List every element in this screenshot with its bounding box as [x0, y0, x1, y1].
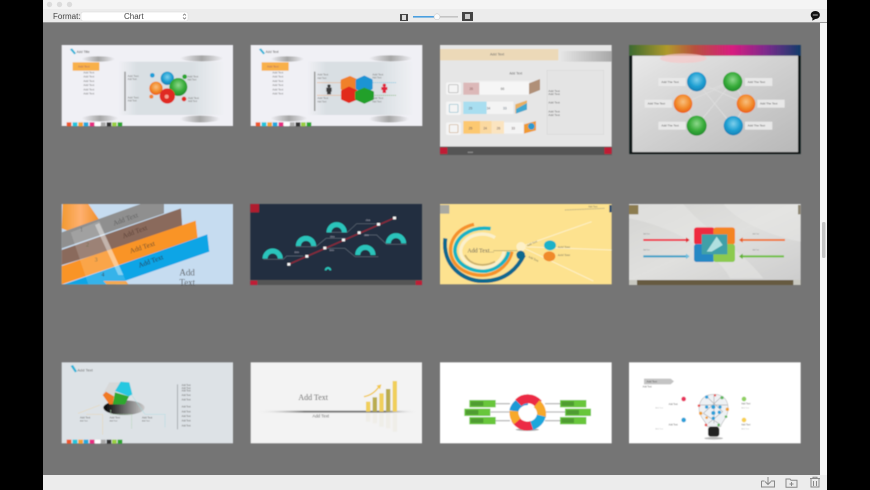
orange menu: Add Text — [267, 64, 279, 68]
hexagon labels: Add Text — [317, 96, 328, 100]
hexagon labels: Add Text — [372, 96, 383, 100]
puzzle — [694, 227, 735, 262]
green marker — [741, 397, 751, 409]
arrow — [364, 384, 381, 397]
arrow labels: Add Text — [643, 232, 650, 235]
sphere labels: Add The Text — [648, 102, 665, 106]
menu list: Add Text — [83, 79, 95, 83]
menu list: Add Text — [83, 83, 95, 87]
right list: Add Text — [182, 410, 191, 413]
row 3: 24 — [483, 126, 487, 130]
gallery of chart thumbnails — [62, 45, 801, 444]
format dropdown — [81, 12, 188, 21]
ray labels: Add Text — [526, 239, 538, 248]
side text box: Add Text — [548, 101, 560, 105]
sphere labels: Add The Text — [661, 80, 679, 84]
icon: add folder — [786, 479, 797, 487]
bubble labels: Add Text — [187, 78, 197, 81]
gauge labels: data — [366, 219, 371, 222]
menu list: Add Text — [83, 87, 95, 91]
gauge labels: data — [294, 251, 300, 254]
centre title: Add Text... — [467, 248, 495, 254]
connector lines — [263, 224, 407, 259]
subtitle: Add Text — [312, 413, 330, 418]
pink marker: Add Text — [669, 403, 678, 406]
hexagon labels: Add Text — [317, 72, 328, 76]
ellipses — [543, 240, 570, 261]
row 2: 25 — [469, 107, 473, 111]
rays — [521, 222, 612, 281]
slide title: Add Text — [77, 367, 94, 372]
thumbnail: yellow concentric arcs — [440, 204, 612, 284]
row 3: 26 — [497, 126, 501, 130]
header note: Add Text — [588, 206, 598, 209]
hexagon cluster — [342, 77, 373, 102]
add text caption — [179, 268, 196, 287]
icon: download — [762, 477, 774, 487]
menu list — [83, 70, 95, 96]
leader labels: Add Text — [110, 415, 120, 419]
sphere labels: Add The Text — [748, 124, 765, 128]
menu list: Add Text — [272, 70, 283, 74]
bubble labels: Add Text — [128, 74, 139, 78]
grey ribbon — [62, 204, 164, 248]
icon: chat bubble — [811, 11, 820, 21]
icon: pencil — [71, 365, 77, 372]
bubble labels — [128, 74, 199, 103]
orange ribbon — [62, 221, 198, 284]
row 3: 25 — [469, 126, 473, 130]
header note — [565, 206, 605, 210]
add text caption: Text — [179, 277, 196, 287]
leader labels — [80, 415, 153, 423]
row 1 — [446, 79, 540, 95]
blue marker — [655, 418, 686, 430]
brown ribbon: Add Text — [121, 224, 148, 240]
rainbow header — [629, 45, 801, 56]
ray labels: Add Text — [528, 255, 539, 263]
menu list: Add Text — [83, 70, 95, 74]
shadow — [103, 400, 145, 415]
thumbnail: ring with green boxes — [440, 362, 612, 443]
side text box: Add Text — [548, 113, 560, 117]
glass highlight — [71, 221, 127, 284]
thumbnail: four hexagons with people — [251, 45, 422, 126]
brown ribbon — [62, 208, 182, 265]
bubble labels: Add Text — [188, 100, 197, 103]
title bar — [43, 0, 827, 12]
yellow marker: Add Text — [741, 427, 749, 430]
add text caption: Add — [179, 268, 195, 278]
format label: Format: — [53, 12, 81, 21]
brown ribbon: 2 — [86, 243, 89, 249]
green marker: Add Text — [741, 406, 749, 409]
concentric arcs — [445, 224, 524, 281]
right list: Add Text — [182, 399, 191, 402]
bubble labels: Add Text — [188, 96, 199, 100]
leader labels: Add Text — [80, 420, 88, 423]
blue ribbon — [64, 234, 209, 284]
orange ribbon: 3 — [95, 258, 98, 264]
dotted guides — [317, 83, 396, 95]
menu list: Add Text — [272, 75, 283, 79]
leader lines — [78, 395, 165, 434]
row 2: 33 — [503, 107, 507, 111]
right list — [182, 384, 191, 427]
thumbnail: puzzle with arrows — [629, 204, 801, 285]
grey ribbon: Add Text — [112, 211, 139, 228]
orange band bottom — [103, 281, 128, 284]
spheres — [674, 72, 755, 136]
leader labels: Add Text — [142, 420, 150, 423]
toolbar — [43, 9, 827, 23]
menu list — [272, 70, 283, 96]
baseline shadow — [257, 411, 417, 413]
timeline — [287, 217, 396, 266]
header band: Add Text — [490, 53, 504, 57]
arrow labels — [643, 232, 760, 252]
leader labels: Add Text — [142, 415, 153, 419]
slide title: Add Text — [298, 393, 329, 402]
side text box: Add Text — [548, 109, 560, 113]
table title: Add Text — [509, 71, 522, 75]
vertical orange band — [62, 204, 99, 232]
right list: Add Text — [182, 424, 191, 427]
arrow labels: Add Text — [643, 249, 650, 252]
ellipses: Add Text — [558, 245, 570, 249]
slide title: Add Text — [266, 50, 279, 54]
sphere labels — [645, 78, 785, 130]
leader labels: Add Text — [110, 420, 118, 423]
ray labels — [526, 239, 539, 263]
sphere labels: Add The Text — [760, 102, 778, 106]
grey ribbon: 1 — [80, 228, 83, 234]
right list: Add Text — [182, 394, 191, 397]
hexagon labels: Add Text — [317, 77, 327, 80]
blue ribbon: Add Text — [137, 253, 164, 270]
hexagon labels: Add Text — [372, 77, 382, 80]
connector lines — [683, 82, 746, 126]
bubble labels: Add Text — [128, 99, 137, 102]
hexagon labels: Add Text — [317, 100, 327, 103]
menu list: Add Text — [272, 92, 283, 96]
row 3 — [446, 121, 536, 135]
green marker: Add Text — [741, 403, 751, 406]
scrollbar — [820, 23, 827, 475]
colour swatches — [67, 440, 122, 444]
gauges — [265, 225, 404, 270]
bubble labels: Add Text — [187, 74, 198, 78]
blue ribbon: 4 — [101, 273, 104, 279]
format dropdown: Chart — [124, 12, 144, 21]
thumbnail: diagonal ribbons — [62, 204, 233, 287]
menu list: Add Text — [83, 92, 95, 96]
thumbnail: hexagon bubbles — [62, 45, 233, 126]
arrow labels: Add Text — [753, 232, 760, 235]
bubble labels: Add Text — [128, 78, 137, 81]
yellow marker: Add Text — [741, 424, 751, 427]
pink marker — [655, 397, 686, 410]
thumbnail: 3D table — [440, 45, 612, 155]
slide title: Add Title — [77, 50, 90, 54]
side text box: Add Text — [548, 89, 560, 93]
ellipses: Add Text — [558, 253, 570, 257]
bubble labels: Add Text — [128, 95, 139, 99]
header band — [440, 49, 558, 60]
gauge labels: data — [330, 235, 335, 238]
nav bar — [440, 147, 612, 155]
thumbnail: six spheres — [629, 45, 801, 154]
icon: person dark — [326, 84, 332, 94]
hexagon labels — [317, 72, 383, 103]
icon: person red — [381, 84, 387, 93]
sphere labels: Add The Text — [661, 124, 679, 128]
right list: Add Text — [182, 384, 191, 387]
icon: pencil — [259, 48, 265, 54]
row 1: 66 — [501, 87, 505, 91]
bubble cluster — [149, 72, 187, 104]
row 2: 34 — [487, 107, 491, 111]
side text box — [547, 70, 604, 134]
right list: Add Text — [182, 415, 191, 418]
bar chart — [366, 381, 397, 432]
menu list: Add Text — [83, 75, 95, 79]
colour swatches — [256, 122, 311, 126]
thumbnail: rising bars — [251, 362, 422, 443]
right list: Add Text — [182, 420, 191, 423]
ring — [514, 399, 542, 426]
menu list: Add Text — [272, 83, 283, 87]
side text box: Add Text — [548, 92, 560, 96]
thumbnail: light bulb network — [629, 362, 801, 443]
thumbnail: dark timeline gauges — [250, 204, 422, 285]
right boxes — [560, 400, 591, 424]
pink marker: Add Text — [655, 407, 663, 410]
bottom bar — [43, 475, 827, 490]
blue marker: Add Text — [655, 427, 663, 430]
colour swatches — [67, 122, 122, 126]
title tag — [643, 379, 674, 389]
orange menu: Add Text — [78, 64, 90, 68]
yellow marker — [741, 418, 751, 430]
connector lines — [491, 404, 565, 421]
right list: Add Text — [182, 406, 191, 409]
menu list: Add Text — [272, 87, 283, 91]
polyhedron — [103, 382, 132, 404]
orange ribbon: Add Text — [129, 240, 156, 255]
row 2 — [446, 100, 527, 115]
size slider — [400, 12, 473, 21]
thumbnail: dodecahedron — [62, 362, 233, 444]
sphere labels: Add The Text — [748, 80, 765, 84]
title tag: Add Text — [647, 380, 657, 384]
icon: pencil — [70, 48, 76, 54]
arrows — [643, 240, 785, 256]
row 1: 26 — [469, 87, 473, 91]
hexagon labels: Add Text — [372, 100, 382, 103]
right list: Add Text — [182, 387, 191, 390]
gauge labels: data — [329, 249, 335, 252]
icon: trash — [810, 477, 820, 487]
title tag: Add Text — [643, 386, 652, 389]
orange menu — [262, 62, 289, 71]
hexagon labels: Add Text — [372, 72, 383, 76]
arrow labels: Add Text — [753, 249, 760, 252]
left boxes — [464, 400, 496, 424]
bulb — [698, 394, 729, 440]
orange menu — [73, 62, 99, 71]
row 3: 33 — [511, 126, 515, 130]
gauge labels: data — [364, 234, 369, 237]
menu list: Add Text — [272, 79, 283, 83]
right list: Add Text — [182, 389, 191, 392]
gauge labels — [294, 219, 371, 254]
leader labels: Add Text — [80, 415, 91, 419]
blue marker: Add Text — [669, 424, 678, 427]
